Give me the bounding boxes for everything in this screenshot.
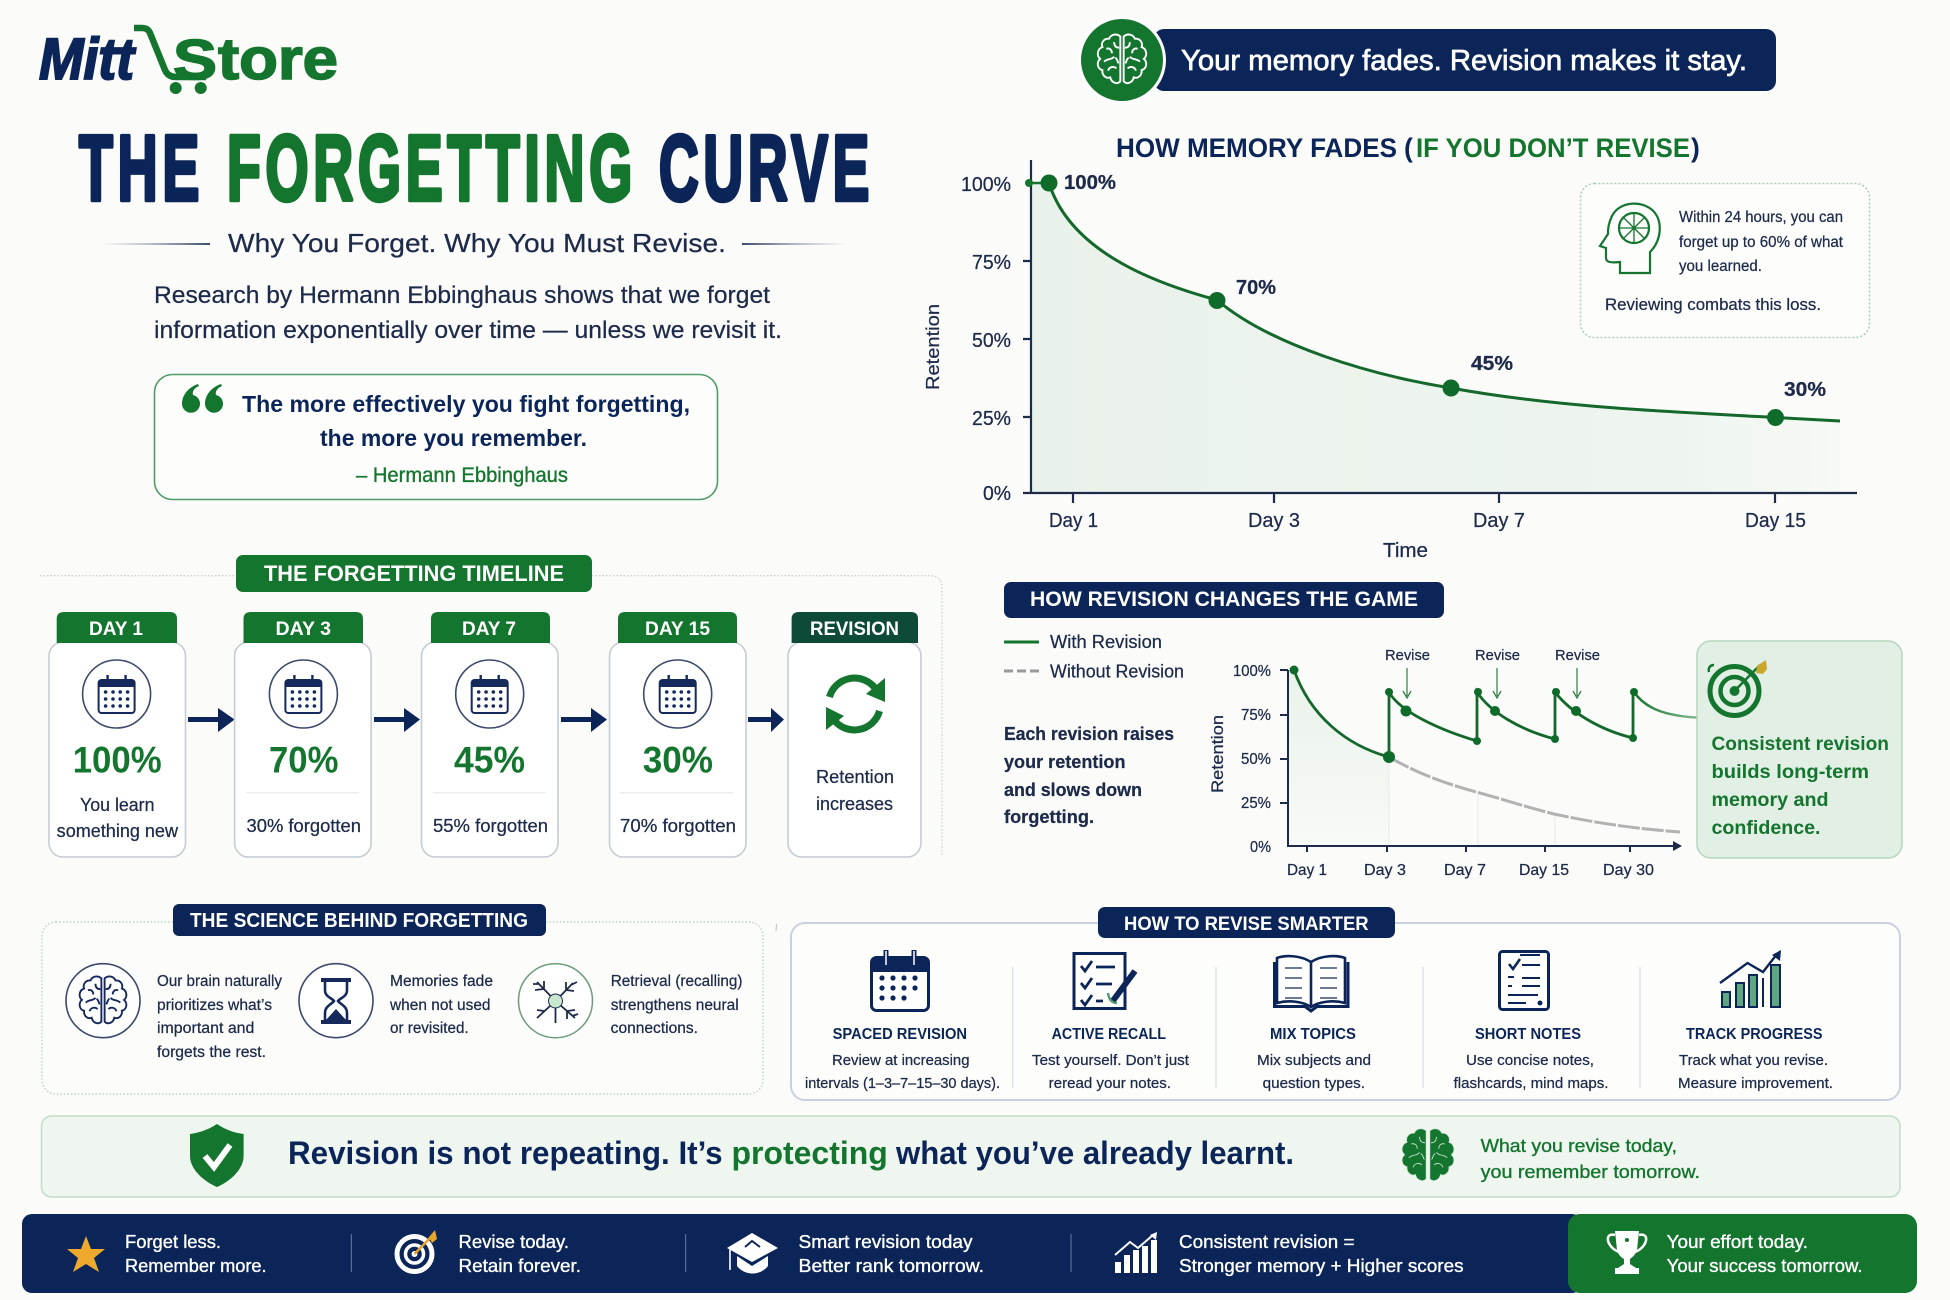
chart: forgetting curve: 0%: [983, 483, 1011, 505]
card: day 15: 70% forgotten: [620, 816, 736, 836]
science text 3: connections.: [611, 1020, 698, 1037]
footer item: smart revision: [727, 1232, 984, 1276]
icon: refresh: [826, 678, 885, 730]
chart: revision retention: 75%: [1241, 707, 1271, 724]
heading: how revision changes the game: [1004, 582, 1444, 618]
item: spaced revision: SPACED REVISION: [833, 1026, 967, 1043]
chart: forgetting curve: 25%: [972, 408, 1011, 430]
item: short notes: [1454, 952, 1608, 1092]
item: mix topics: [1257, 956, 1371, 1092]
banner message: what you’ve already learnt.: [895, 1135, 1294, 1171]
icon: trophy: [1608, 1231, 1646, 1274]
panel: quote: the more you remember.: [320, 425, 587, 451]
chart: revision retention: Day 7: [1444, 862, 1486, 879]
banner message: Revision is not repeating. It’s: [288, 1135, 723, 1171]
title: CURVE: [659, 116, 874, 220]
title: FORGETTING: [227, 116, 637, 220]
footer bar: [22, 1214, 1582, 1293]
chart: forgetting curve: 50%: [972, 330, 1011, 352]
footer item: consistent revision: Stronger memory + Higher scores: [1179, 1256, 1464, 1276]
callout: within 24 hours: Within 24 hours, you can: [1679, 209, 1843, 226]
item: spaced revision: [805, 950, 1000, 1092]
card: day 7: [422, 612, 558, 857]
item: spaced revision: intervals (1–3–7–15–30 days).: [805, 1076, 1000, 1092]
chart: revision retention: Retention: [1208, 715, 1227, 793]
card: day 15: [610, 612, 746, 857]
chart: forgetting curve: 75%: [972, 252, 1011, 274]
title: THE: [79, 116, 204, 220]
science text 1: [157, 973, 282, 1061]
chart: revision retention: Day 15: [1519, 862, 1569, 879]
card: day 3: 70%: [269, 740, 338, 781]
science text 2: Memories fade: [390, 973, 493, 990]
science text 2: [389, 973, 493, 1037]
item: short notes: flashcards, mind maps.: [1454, 1076, 1608, 1092]
card: day 15: 30%: [643, 740, 713, 781]
card: day 15: DAY 15: [645, 618, 710, 640]
chart: forgetting curve: 100%: [961, 174, 1011, 196]
item: active recall: Test yourself. Don’t just: [1032, 1053, 1189, 1069]
arrow: [748, 708, 784, 732]
intro paragraph: information exponentially over time — unless we revisit it.: [154, 317, 782, 344]
science text 2: when not used: [389, 997, 490, 1014]
card: day 3: 30% forgotten: [246, 816, 361, 836]
footer panel: your effort today: Your success tomorrow.: [1667, 1256, 1862, 1276]
chart: revision retention: Day 3: [1364, 862, 1406, 879]
item: active recall: [1032, 954, 1189, 1092]
heading: how memory fades: IF YOU DON’T REVISE: [1416, 133, 1690, 163]
chart: revision retention: Revise: [1385, 647, 1430, 664]
text: each revision raises: and slows down: [1004, 779, 1142, 800]
callout: within 24 hours: Reviewing combats this loss.: [1605, 296, 1821, 314]
science text 3: strengthens neural: [611, 997, 739, 1014]
icon: shield: [190, 1124, 244, 1187]
panel: consistent revision: [1697, 641, 1902, 858]
science text 1: important and: [157, 1020, 254, 1037]
banner: memory fades: Your memory fades. Revision makes it stay.: [1181, 45, 1747, 77]
card: day 1: something new: [57, 821, 179, 841]
intro paragraph: [154, 282, 782, 344]
footer item: consistent revision: [1115, 1232, 1464, 1276]
card: day 3: [235, 612, 371, 857]
icon: notes page: [1500, 952, 1548, 1010]
legend: [1004, 632, 1184, 682]
banner side note: [1481, 1136, 1700, 1182]
chart: forgetting curve: Day 15: [1745, 510, 1806, 532]
footer item: consistent revision: Consistent revision =: [1179, 1232, 1354, 1252]
banner side note: What you revise today,: [1481, 1136, 1677, 1156]
chart: forgetting curve: Day 7: [1473, 510, 1525, 532]
item: track progress: TRACK PROGRESS: [1686, 1026, 1822, 1043]
icon: green brain: [1402, 1129, 1454, 1181]
chart: forgetting curve: 100%: [1064, 172, 1116, 194]
card: revision: Retention: [816, 767, 894, 787]
callout: within 24 hours: you learned.: [1679, 258, 1762, 275]
footer item: revise today: [397, 1230, 581, 1276]
card: day 7: DAY 7: [462, 618, 516, 640]
timeline heading: THE FORGETTING TIMELINE: [264, 561, 564, 586]
text: each revision raises: your retention: [1004, 751, 1126, 772]
logo: MittStore: Mitt: [39, 27, 136, 92]
chart: revision retention: Day 1: [1287, 862, 1327, 879]
arrow: [561, 708, 607, 732]
item: mix topics: Mix subjects and: [1257, 1053, 1371, 1069]
chart: revision retention: Revise: [1475, 647, 1520, 664]
item: track progress: [1678, 950, 1833, 1092]
text: each revision raises: [1004, 723, 1174, 827]
card: day 7: 45%: [454, 740, 525, 781]
heading: how memory fades: (: [1404, 133, 1413, 163]
chart: forgetting curve: [923, 160, 1857, 562]
panel: quote: The more effectively you fight forgetting,: [242, 391, 690, 417]
item: mix topics: MIX TOPICS: [1270, 1026, 1356, 1043]
icon: checklist: [1074, 954, 1135, 1008]
footer panel: your effort today: Your effort today.: [1667, 1232, 1808, 1252]
banner: memory fades: [1078, 16, 1776, 104]
chart: forgetting curve: 70%: [1236, 277, 1276, 299]
card: day 1: [49, 612, 186, 857]
text: each revision raises: forgetting.: [1004, 806, 1094, 827]
chart: forgetting curve: 45%: [1471, 353, 1513, 375]
card: revision: [788, 612, 921, 857]
science heading: [173, 904, 546, 936]
icon: target: [1709, 660, 1767, 716]
chart: forgetting curve: 30%: [1784, 379, 1826, 401]
chart: revision retention: [1208, 647, 1713, 879]
footer item: smart revision: Better rank tomorrow.: [798, 1256, 984, 1276]
icon: neuron: [518, 964, 592, 1038]
icon: progress bars: [1720, 950, 1781, 1007]
banner message: protecting: [732, 1135, 888, 1171]
science text 3: Retrieval (recalling): [611, 973, 742, 990]
item: active recall: reread your notes.: [1049, 1076, 1171, 1092]
icon: calendar: [872, 950, 928, 1010]
chart: forgetting curve: Retention: [923, 304, 943, 390]
arrow: [374, 708, 420, 732]
heading: how revision changes the game: HOW REVISION CHANGES THE GAME: [1030, 587, 1418, 611]
chart: forgetting curve: Day 1: [1049, 510, 1098, 532]
item: short notes: Use concise notes,: [1466, 1053, 1594, 1069]
panel: quote: – Hermann Ebbinghaus: [356, 464, 568, 487]
card: revision: REVISION: [810, 618, 899, 640]
chart: revision retention: 100%: [1233, 663, 1271, 680]
chart: revision retention: 50%: [1241, 751, 1271, 768]
item: mix topics: question types.: [1263, 1076, 1365, 1092]
heading: how memory fades: [1116, 133, 1700, 163]
footer item: forget less: Forget less.: [125, 1232, 221, 1252]
panel: the forgetting timeline: [40, 555, 942, 857]
icon: hourglass: [299, 964, 373, 1038]
timeline heading: [236, 555, 592, 592]
footer item: revise today: Revise today.: [458, 1232, 569, 1252]
card: day 1: 100%: [73, 740, 162, 781]
heading: how memory fades: ): [1691, 133, 1700, 163]
card: day 3: DAY 3: [276, 618, 331, 640]
panel: how to revise smarter: [791, 907, 1900, 1100]
heading: how memory fades: HOW MEMORY FADES: [1116, 133, 1397, 163]
legend: Without Revision: [1050, 662, 1184, 682]
item: track progress: Track what you revise.: [1679, 1053, 1828, 1069]
card: revision: increases: [816, 794, 893, 814]
footer item: forget less: [67, 1232, 267, 1276]
smarter heading: HOW TO REVISE SMARTER: [1124, 913, 1369, 935]
science text 2: or revisited.: [390, 1020, 469, 1037]
chart: forgetting curve: Time: [1383, 540, 1428, 562]
chart: revision retention: Day 30: [1603, 862, 1654, 879]
banner side note: you remember tomorrow.: [1481, 1162, 1700, 1182]
science text 3: [611, 973, 742, 1037]
subtitle: Why You Forget. Why You Must Revise.: [228, 228, 726, 258]
item: short notes: SHORT NOTES: [1475, 1026, 1581, 1043]
chart: revision retention: 25%: [1241, 795, 1271, 812]
panel: the science behind forgetting: [42, 904, 776, 1094]
item: active recall: ACTIVE RECALL: [1052, 1026, 1166, 1043]
icon: head with brain: [1600, 204, 1660, 273]
footer panel: your effort today: [1568, 1214, 1917, 1293]
panel: consistent revision: Consistent revision: [1712, 733, 1889, 755]
text: each revision raises: Each revision raises: [1004, 723, 1174, 744]
chart: forgetting curve: Day 3: [1248, 510, 1300, 532]
callout: within 24 hours: forget up to 60% of what: [1679, 234, 1844, 251]
panel: consistent revision: confidence.: [1712, 817, 1820, 839]
logo: MittStore: [39, 27, 338, 94]
chart: revision retention: Revise: [1555, 647, 1600, 664]
logo: MittStore: S: [173, 28, 217, 92]
item: track progress: Measure improvement.: [1678, 1076, 1833, 1092]
legend: With Revision: [1050, 632, 1162, 652]
item: spaced revision: Review at increasing: [832, 1053, 970, 1069]
icon: open book: [1274, 956, 1348, 1011]
banner message: [288, 1135, 1294, 1171]
panel: consistent revision: memory and: [1712, 789, 1828, 811]
panel: consistent revision: builds long-term: [1712, 761, 1869, 783]
science text 1: prioritizes what’s: [157, 997, 272, 1014]
logo: MittStore: tore: [218, 27, 338, 92]
card: day 1: You learn: [80, 795, 154, 815]
science heading: THE SCIENCE BEHIND FORGETTING: [190, 910, 528, 932]
intro paragraph: Research by Hermann Ebbinghaus shows that we forget: [154, 282, 770, 309]
panel: quote: [154, 374, 718, 500]
arrow: [188, 708, 235, 732]
callout: within 24 hours: [1580, 184, 1870, 338]
footer item: smart revision: Smart revision today: [798, 1232, 973, 1252]
footer item: forget less: Remember more.: [125, 1256, 267, 1276]
chart: revision retention: 0%: [1250, 839, 1271, 856]
science text 1: Our brain naturally: [157, 973, 282, 990]
science text 1: forgets the rest.: [157, 1044, 266, 1061]
banner: revision is not repeating: [42, 1116, 1900, 1197]
card: day 1: DAY 1: [89, 618, 143, 640]
smarter heading: [1098, 907, 1395, 938]
icon: brain: [66, 964, 140, 1038]
card: day 7: 55% forgotten: [433, 816, 548, 836]
footer item: revise today: Retain forever.: [458, 1256, 581, 1276]
